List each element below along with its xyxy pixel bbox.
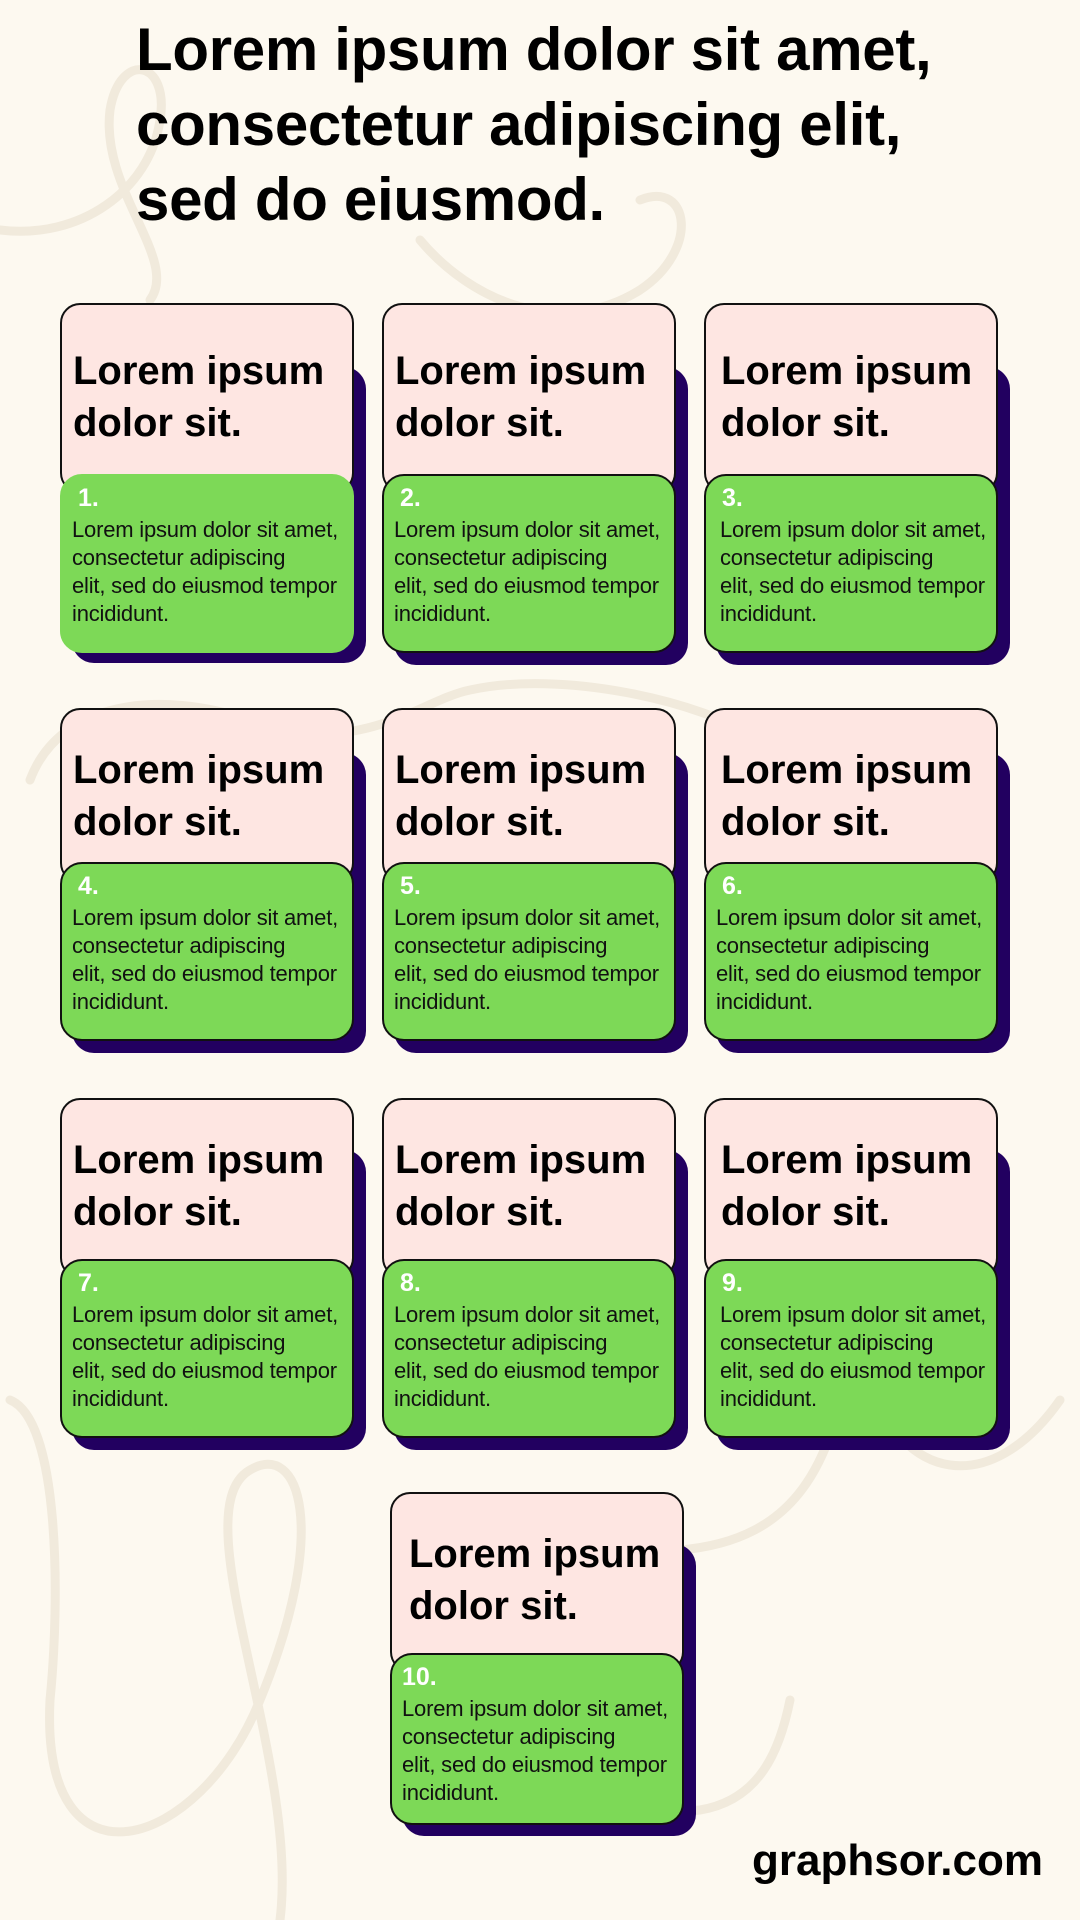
title [136,16,931,233]
card 5: elit, sed do eiusmod tempor [394,961,659,986]
card 2: dolor sit. [395,401,564,445]
card 4: dolor sit. [73,800,242,844]
card 1: Lorem ipsum dolor sit amet, [72,517,338,542]
card 2: Lorem ipsum dolor sit amet, [394,517,660,542]
card 1: dolor sit. [73,401,242,445]
card 8: dolor sit. [395,1190,564,1234]
card 10: Lorem ipsum [409,1532,660,1576]
card 7 [60,1098,366,1450]
card 2: Lorem ipsum [395,349,646,393]
card 3: consectetur adipiscing [720,545,933,570]
card 9: consectetur adipiscing [720,1330,933,1355]
card 6 [704,708,1010,1053]
card 4: incididunt. [72,989,169,1014]
card 6: Lorem ipsum [721,748,972,792]
card 10 [390,1492,696,1836]
card 2: consectetur adipiscing [394,545,607,570]
card 8: elit, sed do eiusmod tempor [394,1358,659,1383]
title: sed do eiusmod. [136,166,605,233]
card 2: 2. [400,484,421,512]
card 3: 3. [722,484,743,512]
card 7: incididunt. [72,1386,169,1411]
title: Lorem ipsum dolor sit amet, [136,16,931,83]
card 1: Lorem ipsum [73,349,324,393]
card 2 [382,303,688,665]
card 4 [60,708,366,1053]
card 7: dolor sit. [73,1190,242,1234]
card 5: Lorem ipsum [395,748,646,792]
card 1: consectetur adipiscing [72,545,285,570]
card 8: Lorem ipsum [395,1138,646,1182]
card 6: incididunt. [716,989,813,1014]
card 1: incididunt. [72,601,169,626]
card 9: 9. [722,1269,743,1297]
card 10: consectetur adipiscing [402,1724,615,1749]
card 7: 7. [78,1269,99,1297]
card 4: consectetur adipiscing [72,933,285,958]
card 2: elit, sed do eiusmod tempor [394,573,659,598]
card 7: consectetur adipiscing [72,1330,285,1355]
card 4: 4. [78,872,99,900]
card 1: elit, sed do eiusmod tempor [72,573,337,598]
card 5: dolor sit. [395,800,564,844]
card 1: 1. [78,484,99,512]
card 6: Lorem ipsum dolor sit amet, [716,905,982,930]
card 9: dolor sit. [721,1190,890,1234]
card 5 [382,708,688,1053]
title: consectetur adipiscing elit, [136,91,901,158]
card 10: dolor sit. [409,1584,578,1628]
card 6: elit, sed do eiusmod tempor [716,961,981,986]
card 5: 5. [400,872,421,900]
brand footer: graphsor.com [752,1836,1043,1885]
card 7: Lorem ipsum dolor sit amet, [72,1302,338,1327]
card 3: elit, sed do eiusmod tempor [720,573,985,598]
card 1 [60,303,366,663]
card 9: Lorem ipsum dolor sit amet, [720,1302,986,1327]
card 2: incididunt. [394,601,491,626]
card 5: Lorem ipsum dolor sit amet, [394,905,660,930]
card 8 [382,1098,688,1450]
card 7: Lorem ipsum [73,1138,324,1182]
card 4: Lorem ipsum dolor sit amet, [72,905,338,930]
card 10: 10. [402,1663,437,1691]
card 3 [704,303,1010,665]
card 8: 8. [400,1269,421,1297]
card 4: Lorem ipsum [73,748,324,792]
card 5: incididunt. [394,989,491,1014]
card 8: incididunt. [394,1386,491,1411]
card 4: elit, sed do eiusmod tempor [72,961,337,986]
card 3: Lorem ipsum [721,349,972,393]
card 6: 6. [722,872,743,900]
card 8: consectetur adipiscing [394,1330,607,1355]
card 10: Lorem ipsum dolor sit amet, [402,1696,668,1721]
card 6: dolor sit. [721,800,890,844]
card 8: Lorem ipsum dolor sit amet, [394,1302,660,1327]
card 10: incididunt. [402,1780,499,1805]
card 9: incididunt. [720,1386,817,1411]
card 10: elit, sed do eiusmod tempor [402,1752,667,1777]
card 3: incididunt. [720,601,817,626]
card 9: elit, sed do eiusmod tempor [720,1358,985,1383]
card 9: Lorem ipsum [721,1138,972,1182]
card 7: elit, sed do eiusmod tempor [72,1358,337,1383]
card 5: consectetur adipiscing [394,933,607,958]
card 3: dolor sit. [721,401,890,445]
card 3: Lorem ipsum dolor sit amet, [720,517,986,542]
card 6: consectetur adipiscing [716,933,929,958]
card 9 [704,1098,1010,1450]
